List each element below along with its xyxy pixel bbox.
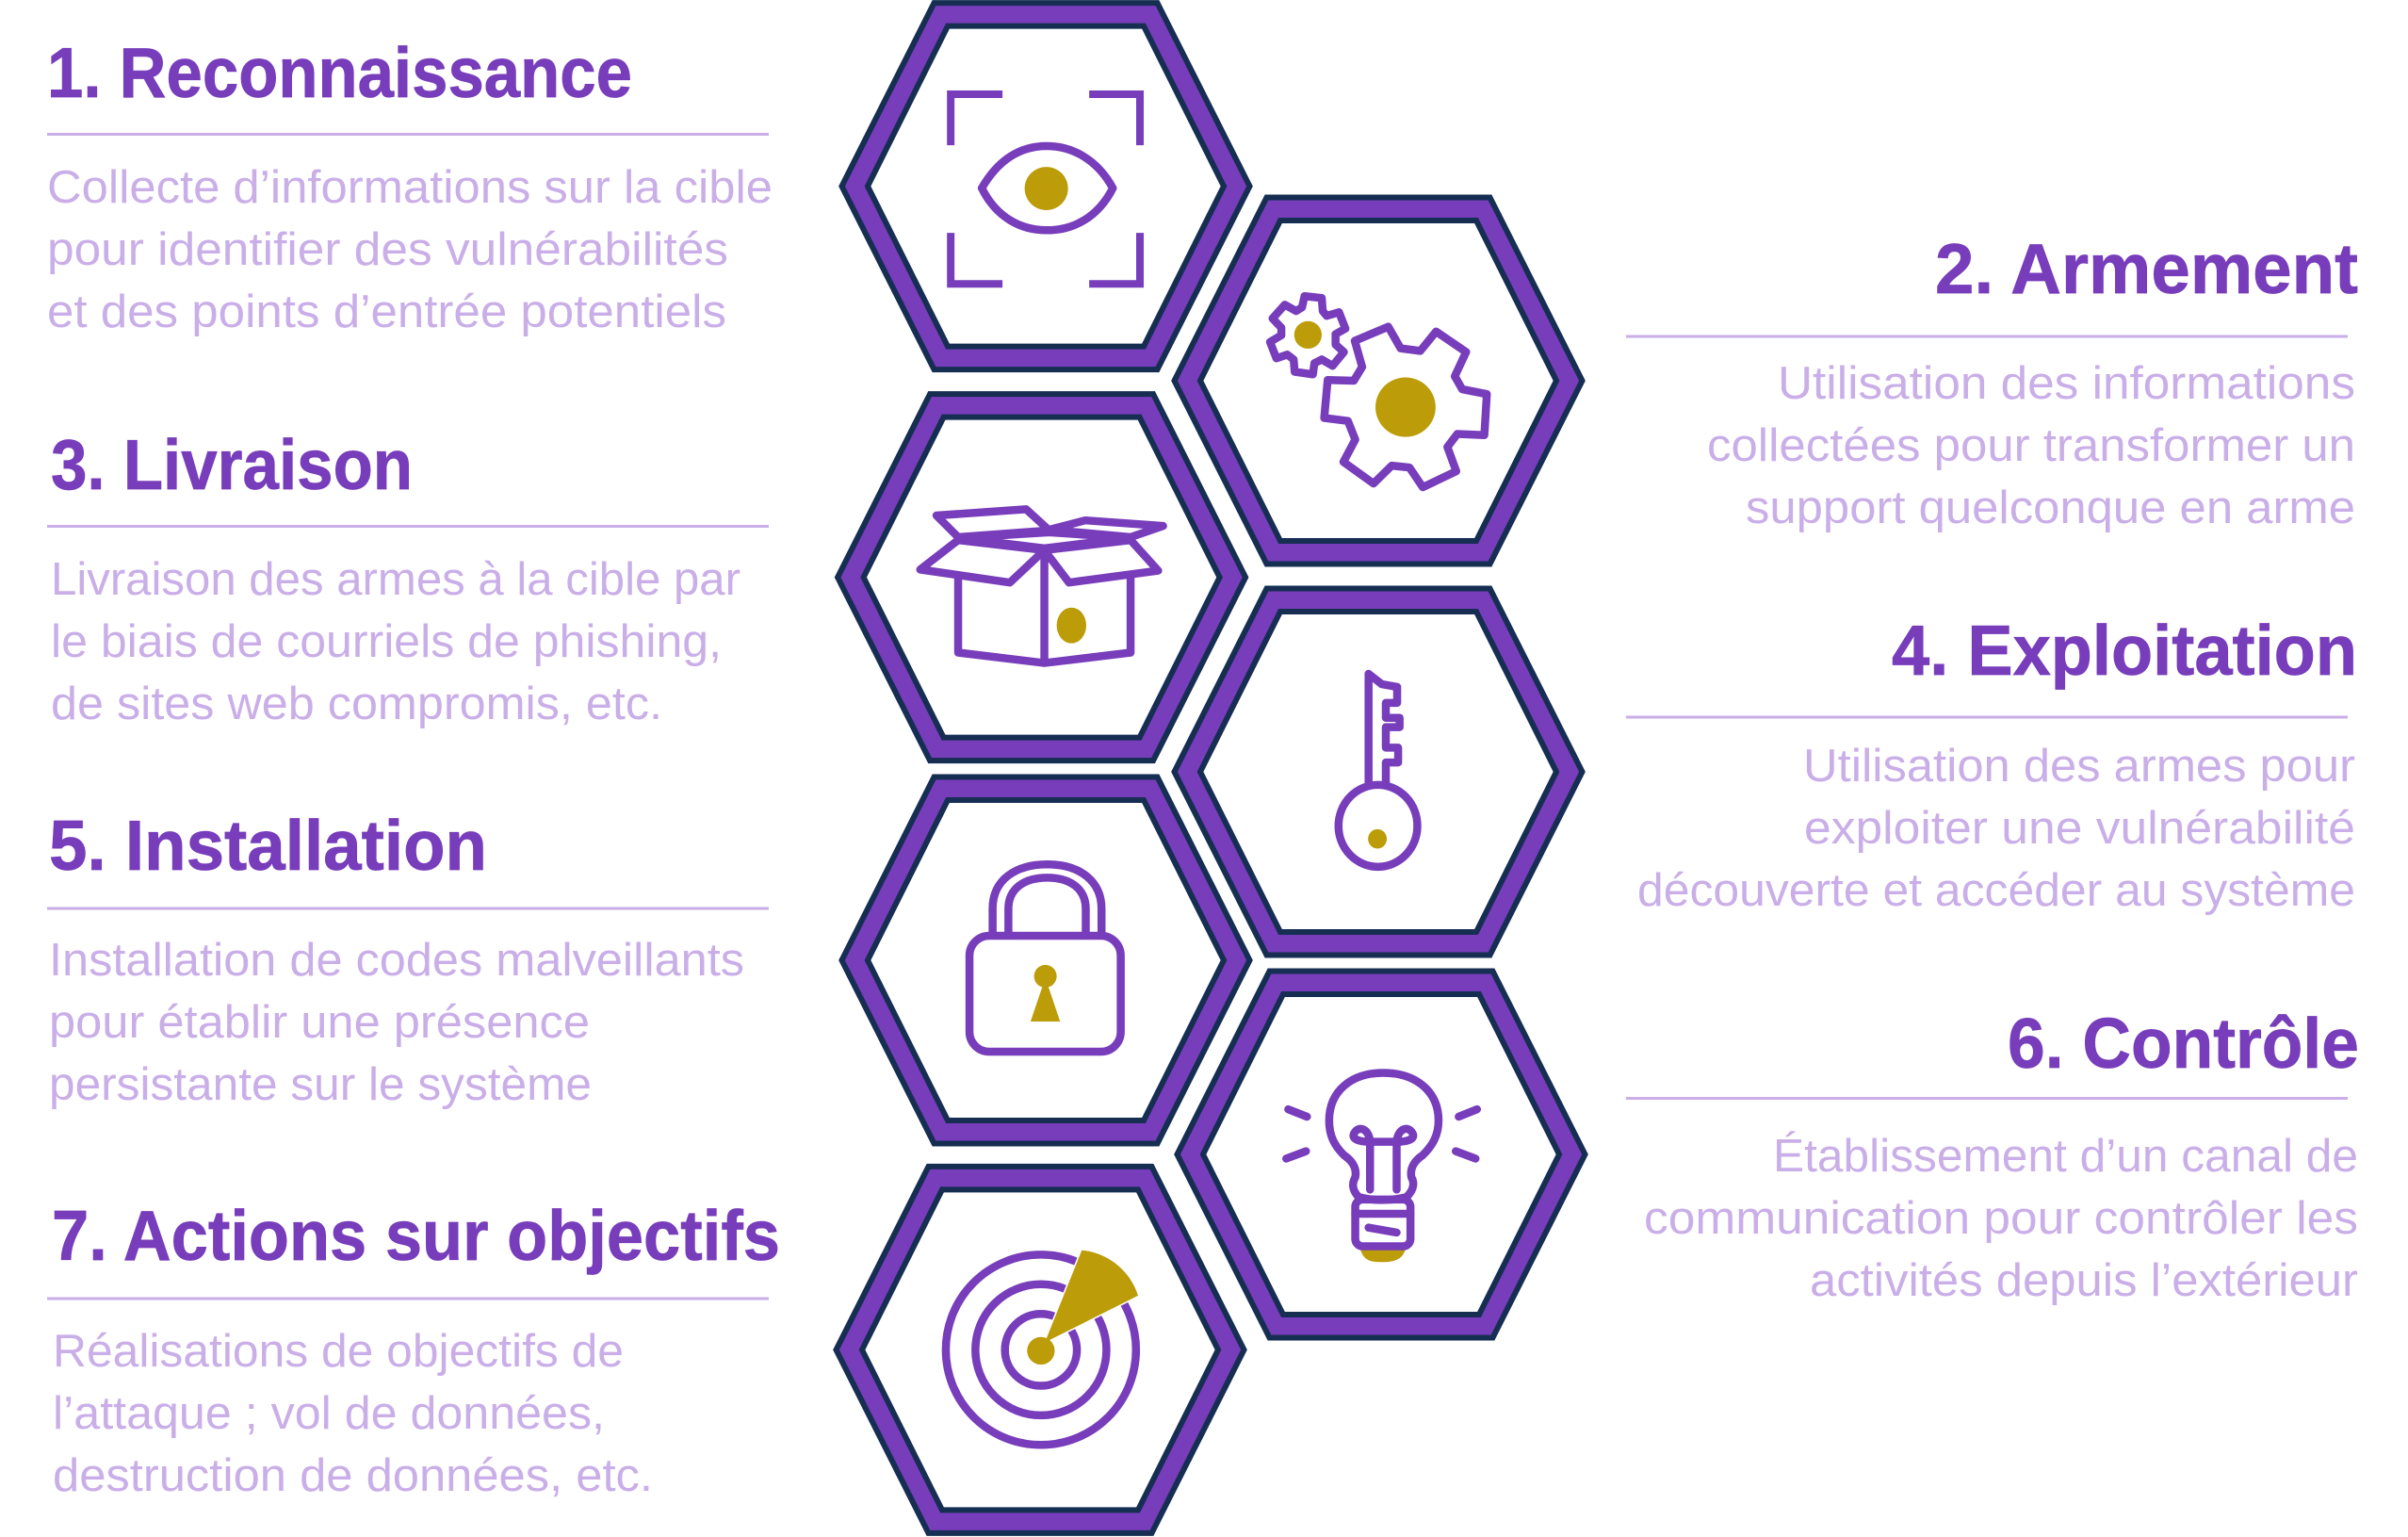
heading: 7. Actions sur objectifs: 7. Actions sur objectifs [52,1196,780,1275]
heading: 2. Armement: 2. Armement [1935,229,2358,308]
text block: 4. Exploitation [1626,611,2357,916]
heading: 5. Installation: 5. Installation [49,806,487,885]
description: Contrôle [1644,1131,2358,1306]
description: Livraison [51,554,740,729]
icon: open box [920,509,1163,663]
hexagon 3: box [838,394,1245,760]
description: Installation: Installation de codes malveillants [49,935,744,986]
icon: eye in viewfinder [951,94,1140,284]
heading: 1. Reconnaissance: 1. Reconnaissance [47,33,632,112]
description: Exploitation: découverte et accéder au système [1637,865,2355,916]
description: Reconnaissance: pour identifier des vulnérabilités [47,224,728,275]
icon: target [946,1251,1138,1445]
description: Livraison: Livraison des armes à la cible par [51,554,740,605]
description: Exploitation [1637,741,2355,916]
hexagon 5: lock [842,777,1249,1144]
description: Actions sur objectifs: Réalisations de objectifs de [53,1326,624,1377]
description: Contrôle: activités depuis l’extérieur [1810,1255,2358,1306]
description: Exploitation: Utilisation des armes pour [1803,741,2355,792]
hexagon 6: light bulb [1178,971,1585,1338]
description: Installation [49,935,744,1110]
description: Livraison: de sites web compromis, etc. [51,679,662,729]
description: Contrôle: Établissement d’un canal de [1773,1131,2358,1182]
description: Installation: pour établir une présence [49,997,590,1048]
text block: 5. Installation [47,806,769,1110]
description: Armement: collectées pour transformer un [1707,420,2355,471]
icon: light bulb [1286,1072,1477,1262]
text block: 1. Reconnaissance [47,33,773,337]
hexagon 1: eye [842,3,1249,369]
description: Contrôle: communication pour contrôler les [1644,1193,2358,1244]
description: Reconnaissance [47,162,773,337]
heading: 4. Exploitation: 4. Exploitation [1892,611,2357,690]
text block: 2. Armement [1626,229,2358,533]
description: Reconnaissance: Collecte d’informations sur la cible [47,162,773,213]
text block: 7. Actions sur objectifs [47,1196,780,1501]
text block: 6. Contrôle [1626,1004,2359,1306]
description: Actions sur objectifs: destruction de données, etc. [53,1450,653,1501]
description: Armement: support quelconque en arme [1746,482,2355,533]
hexagon 7: target [837,1167,1244,1533]
icon: padlock [969,864,1121,1052]
description: Livraison: le biais de courriels de phishing, [51,616,722,667]
description: Actions sur objectifs: l’attaque ; vol de données, [53,1388,605,1439]
description: Installation: persistante sur le système [49,1059,592,1110]
description: Armement [1707,358,2355,533]
heading: 3. Livraison: 3. Livraison [51,425,413,504]
icon: gears [1270,296,1487,487]
description: Actions sur objectifs [53,1326,653,1501]
hexagon 4: key [1174,588,1583,956]
heading: 6. Contrôle: 6. Contrôle [2008,1004,2359,1083]
hexagon 2: gears [1174,198,1583,564]
icon: key [1339,674,1417,867]
description: Armement: Utilisation des informations [1778,358,2355,409]
description: Reconnaissance: et des points d’entrée potentiels [47,286,726,337]
text block: 3. Livraison [47,425,769,729]
description: Exploitation: exploiter une vulnérabilité [1804,803,2355,854]
